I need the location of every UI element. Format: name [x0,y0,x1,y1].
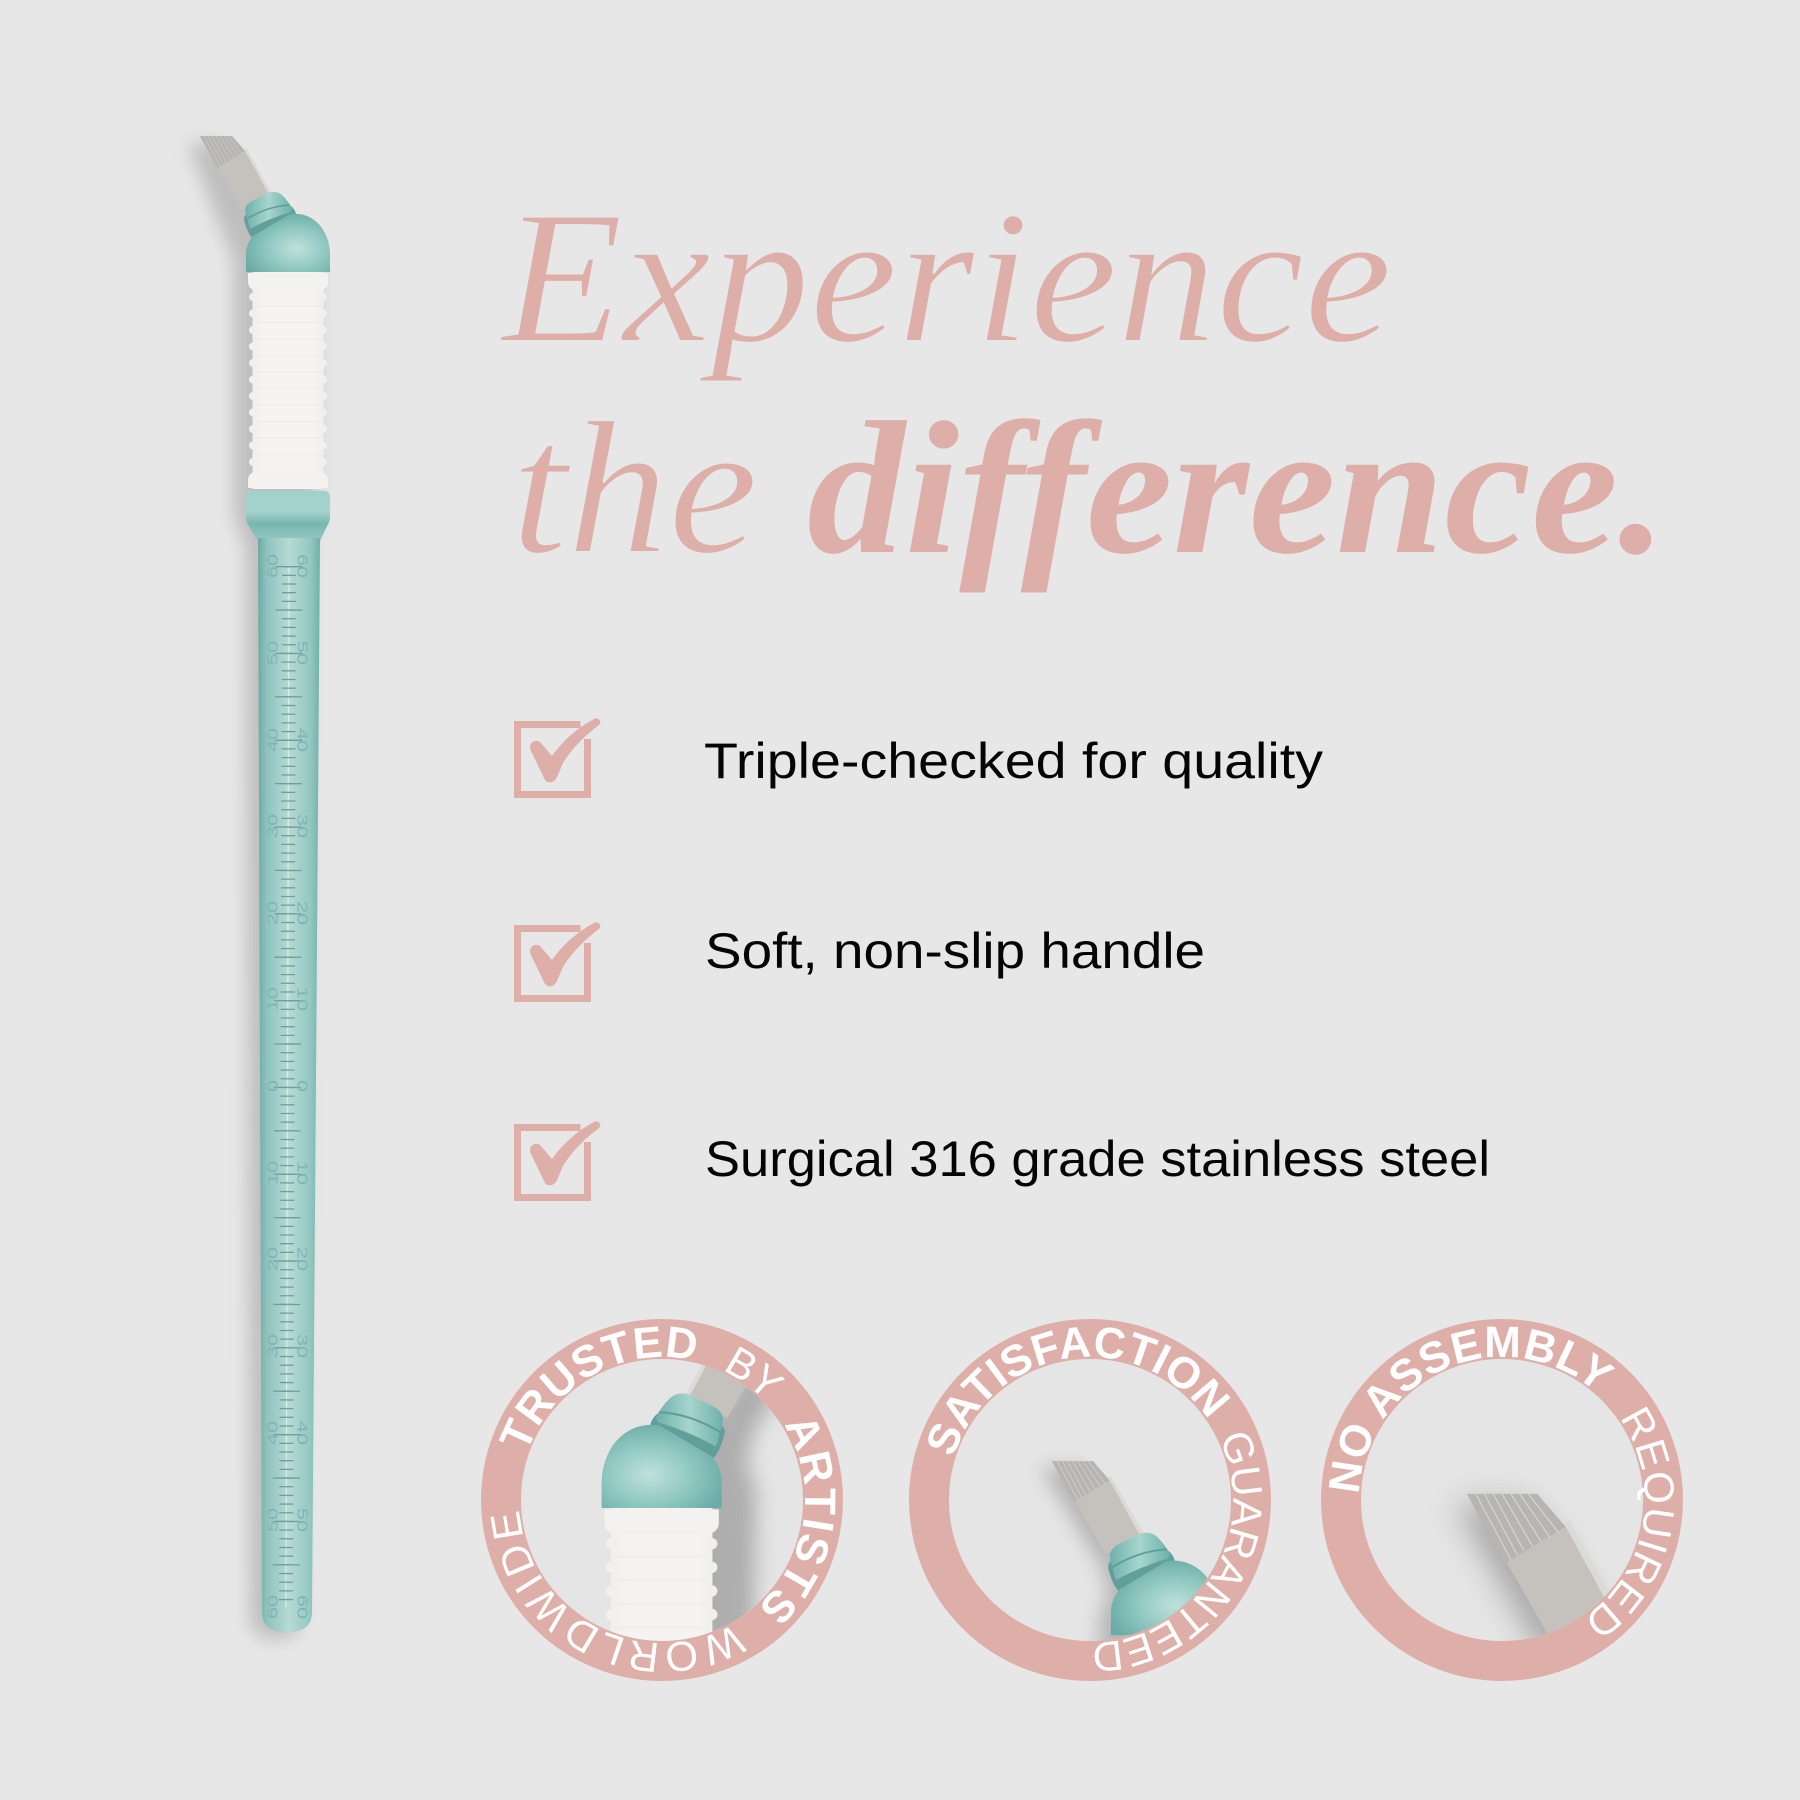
ruler marks [264,554,311,1619]
ruler marks: 50 [264,641,281,665]
icon: checkbox [518,922,600,998]
ruler marks: 60 [294,554,311,578]
feature text: Surgical 316 grade stainless steel [705,1131,1490,1187]
badge photo: blade close-up [1445,1484,1609,1640]
ruler marks: 20 [264,1247,281,1271]
ruler marks: 10 [294,987,311,1011]
feature: steel [518,1121,1490,1198]
ruler marks: 60 [264,1595,281,1619]
ruler marks: 40 [264,728,281,752]
ruler marks: 30 [294,814,311,838]
ruler marks: 40 [294,728,311,752]
ruler marks: 20 [294,1247,311,1271]
feature text: Triple-checked for quality [704,733,1323,789]
badge: trusted by artists worldwide [481,1319,843,1681]
ruler marks: 60 [294,1595,311,1619]
badge photo: pen head [602,1365,776,1641]
ruler marks: 10 [264,1161,281,1185]
feature: handle [518,922,1205,998]
pen grip lower [248,455,328,489]
ruler marks: 40 [294,1421,311,1445]
title line 1: Experience [499,173,1392,383]
ring text: REQUIRED [1590,1406,1674,1634]
ruler marks: 50 [294,641,311,665]
badge ring [501,1339,823,1661]
ruler marks: 0 [264,1080,281,1092]
microblading pen [188,136,330,1639]
badge: satisfaction guaranteed [909,1319,1271,1681]
ring text [1328,1326,1674,1634]
pen lower collar [246,491,330,541]
ring text: WORLDWIDE [490,1511,747,1672]
pen shadow [188,143,318,1639]
ring text: BY [725,1346,785,1394]
pen head [246,214,330,272]
title [499,173,1667,594]
badge ring [929,1339,1251,1661]
pen upper collar [244,192,296,238]
badge photo: blade and collar [1037,1458,1208,1641]
ruler marks: 30 [294,1334,311,1358]
ruler marks: 30 [264,1334,281,1358]
ring text: ARTISTS [762,1422,836,1622]
ruler marks: 50 [264,1508,281,1532]
pen shaft [258,538,320,1632]
ring text: SATISFACTION [928,1327,1230,1454]
title line 2: the: the [511,384,758,594]
ring text: GUARANTEED [1094,1433,1262,1671]
badge: no assembly required [1321,1319,1683,1681]
icon: checkbox [518,1121,600,1198]
ruler marks: 30 [264,814,281,838]
ring text: NO ASSEMBLY [1328,1326,1616,1492]
ring text: TRUSTED [498,1326,696,1444]
feature: triple-checked [518,718,1323,794]
ruler marks: 10 [294,1161,311,1185]
ring text [928,1327,1262,1671]
ring text [490,1326,836,1672]
ruler marks: 0 [294,1080,311,1092]
ruler marks: 20 [294,901,311,925]
badge ring [1341,1339,1663,1661]
ruler marks: 10 [264,987,281,1011]
pen grip upper [248,272,328,460]
feature text: Soft, non-slip handle [705,923,1205,979]
ruler marks: 50 [294,1508,311,1532]
title line 2: difference: difference. [807,384,1667,594]
pen blade [200,136,271,209]
ruler marks: 20 [264,901,281,925]
icon: checkbox [518,718,600,794]
ruler marks: 40 [264,1421,281,1445]
ruler marks: 60 [264,554,281,578]
